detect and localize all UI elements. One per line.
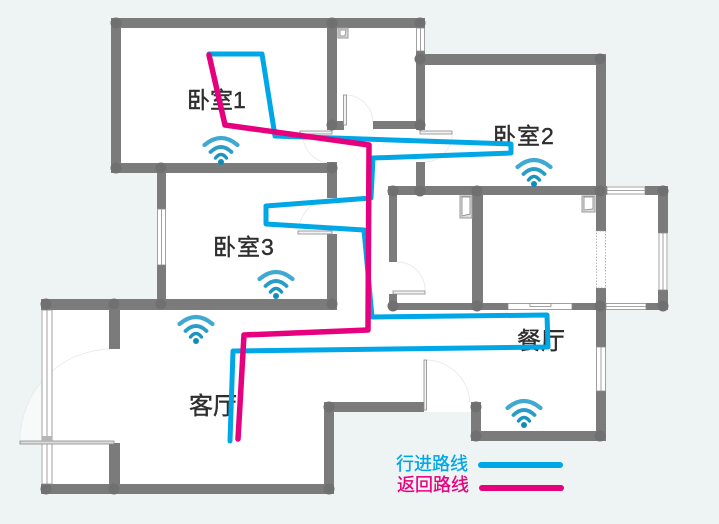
main door swing area outside the wall xyxy=(20,349,112,441)
room label: 客厅: 客厅 xyxy=(189,393,237,420)
legend label: return: 返回路线 xyxy=(397,475,469,495)
icon: wifi bedroom 3 xyxy=(260,272,292,299)
bathroom fixtures xyxy=(338,28,595,218)
return route (magenta) xyxy=(209,55,369,439)
legend xyxy=(396,454,561,495)
icon: wifi living room xyxy=(180,317,212,344)
legend label: outgoing: 行进路线 xyxy=(396,454,468,474)
walls xyxy=(41,18,668,494)
outgoing route (blue) xyxy=(209,54,548,441)
door leaves xyxy=(20,95,452,444)
room label: 餐厅: 餐厅 xyxy=(517,328,565,355)
icon: wifi dining room xyxy=(508,401,540,428)
dotted balcony opening xyxy=(596,231,606,288)
windows xyxy=(42,28,667,484)
legend line: return xyxy=(482,485,561,491)
legend line: outgoing xyxy=(481,462,560,468)
room label: 卧室2: 卧室2 xyxy=(493,123,555,149)
room label: 卧室1: 卧室1 xyxy=(187,87,246,113)
icon: wifi bedroom 2 xyxy=(518,160,550,187)
wall junction columns xyxy=(40,18,668,494)
icon: wifi bedroom 1 xyxy=(204,138,238,165)
door swing arcs xyxy=(20,95,470,441)
apartment floor xyxy=(41,18,668,494)
room label: 卧室3: 卧室3 xyxy=(213,234,275,260)
